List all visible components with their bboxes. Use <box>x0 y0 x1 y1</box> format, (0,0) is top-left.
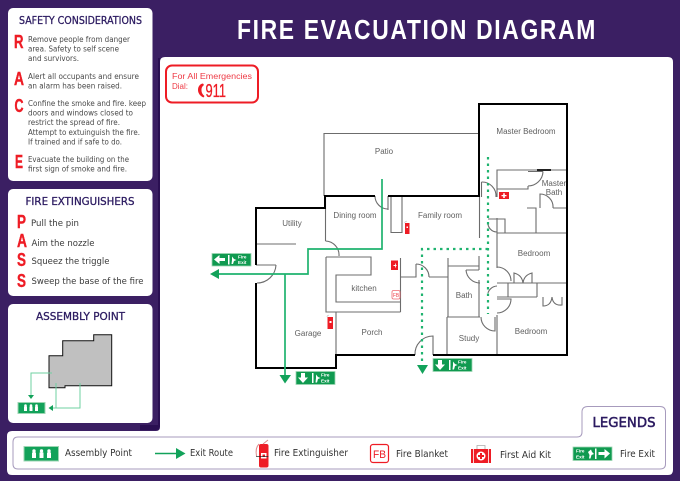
legend: fire extinguisher: Fire Extinguisher <box>274 448 348 459</box>
panel: fire extinguishers <box>8 189 152 296</box>
room labels: Master Bedroom <box>496 127 556 136</box>
step R: area. Safety to self scene <box>28 44 119 54</box>
icon: fire exit sign west <box>212 254 251 266</box>
step P <box>17 212 79 232</box>
step A: Aim the nozzle <box>32 239 95 249</box>
icon: extinguisher family room <box>405 221 410 234</box>
step A: an alarm has been raised. <box>28 82 122 90</box>
mini exit routes <box>28 373 80 411</box>
room labels: Family room <box>418 211 462 220</box>
mini building <box>49 335 112 388</box>
step C: Attempt to extuinguish the fire. <box>28 128 140 137</box>
room labels <box>282 127 567 343</box>
step S squeeze <box>17 250 110 270</box>
room labels: Master <box>542 179 567 188</box>
step C <box>14 96 146 146</box>
title: FIRE EVACUATION DIAGRAM <box>237 14 597 45</box>
room labels: Dining room <box>333 211 377 220</box>
icon: fire blanket <box>392 290 400 299</box>
legend: exit route: Exit Route <box>190 448 233 459</box>
room labels: Porch <box>362 328 382 337</box>
icon: first aid kit hall <box>391 260 398 270</box>
step R: R <box>14 32 24 52</box>
room labels: Bath <box>546 188 562 197</box>
step E <box>15 152 129 174</box>
room labels: Utility <box>282 219 302 228</box>
room labels: Patio <box>375 147 394 156</box>
legend: first aid kit <box>471 446 551 463</box>
step S squeeze: S <box>17 250 26 270</box>
icon: phone <box>198 84 204 98</box>
step S sweep <box>17 271 144 291</box>
icon: fire exit sign west: Exit <box>238 260 247 265</box>
icon: fire exit sign south <box>296 372 335 384</box>
panel: legends <box>13 406 666 469</box>
icon: fire exit sign porch <box>433 358 472 372</box>
legend: fire exit <box>573 447 655 460</box>
legend: first aid kit: First Aid Kit <box>500 450 551 461</box>
step S sweep: Sweep the base of the fire <box>32 277 144 287</box>
step E: first sign of smoke and fire. <box>28 164 127 174</box>
thick exterior walls <box>256 104 567 368</box>
step C: restrict the spread of fire. <box>28 118 120 127</box>
icon: extinguisher garage <box>327 315 333 329</box>
legend: exit route <box>155 448 233 459</box>
icon: fire exit sign porch: Exit <box>458 366 467 370</box>
arrow: south exit <box>280 375 291 384</box>
heading: fire extinguishers: FIRE EXTINGUISHERS <box>26 195 135 208</box>
icon: fire exit sign west: Fire <box>238 254 247 260</box>
legend: fire exit: Fire Exit <box>620 449 655 460</box>
callout: emergency number: For All Emergencies <box>172 72 252 81</box>
legend: assembly point: Assembly Point <box>65 448 132 459</box>
legend: fire blanket <box>370 444 448 462</box>
room labels: Study <box>459 334 479 343</box>
step P: P <box>17 212 26 232</box>
step A: A <box>14 69 24 89</box>
step C: Confine the smoke and fire. keep <box>28 99 146 108</box>
room labels: Bedroom <box>515 327 548 336</box>
callout: emergency number: Dial: <box>172 82 188 91</box>
step A <box>14 69 139 90</box>
panel: assembly point <box>8 304 152 423</box>
solid exit route <box>210 179 382 384</box>
panel: safety considerations <box>8 8 152 181</box>
heading: safety considerations: SAFETY CONSIDERATIONS <box>19 14 142 27</box>
icon: first aid kit master <box>499 192 509 199</box>
callout: emergency number <box>166 66 258 102</box>
legend: fire blanket: Fire Blanket <box>396 449 448 460</box>
step S squeeze: Squeez the triggle <box>32 257 110 267</box>
arrow: porch exit <box>417 365 428 374</box>
heading: legends: LEGENDS <box>592 415 656 431</box>
arrow: west exit <box>210 269 219 279</box>
room labels: Bedroom <box>518 249 551 258</box>
step E: Evacuate the building on the <box>28 155 129 164</box>
step R: and survivors. <box>28 54 79 63</box>
icon: fire blanket: FB <box>393 293 400 299</box>
step R: Remove people from danger <box>28 35 131 44</box>
icon: fire exit sign south: Fire <box>321 372 330 378</box>
step C: If trained and if safe to do. <box>28 138 122 146</box>
legend: fire exit: Fire <box>576 448 585 454</box>
step R <box>14 32 131 63</box>
room labels: kitchen <box>351 284 377 293</box>
room labels: Bath <box>456 291 472 300</box>
step E: E <box>15 152 23 172</box>
step A: Alert all occupants and ensure <box>28 72 139 81</box>
icon: fire exit sign south: Exit <box>321 378 330 384</box>
dashed exit route <box>417 157 488 374</box>
step C: doors and windows closed to <box>28 108 133 118</box>
legend: fire exit: Exit <box>576 454 585 460</box>
step C: C <box>14 96 24 116</box>
mini assembly sign <box>18 402 45 414</box>
legend: fire blanket: FB <box>373 449 386 461</box>
legend: assembly point <box>24 446 132 461</box>
legend: fire extinguisher <box>256 440 348 468</box>
step S sweep: S <box>17 271 26 291</box>
step A: A <box>17 231 27 251</box>
heading: assembly point: ASSEMBLY POINT <box>36 310 125 323</box>
thin interior walls <box>256 134 567 355</box>
step P: Pull the pin <box>31 219 79 229</box>
icon: fire exit sign porch: Fire <box>458 360 467 364</box>
floor plan <box>210 104 567 384</box>
step A <box>17 231 95 251</box>
callout: emergency number: 911 <box>206 81 226 101</box>
room labels: Garage <box>295 329 322 338</box>
